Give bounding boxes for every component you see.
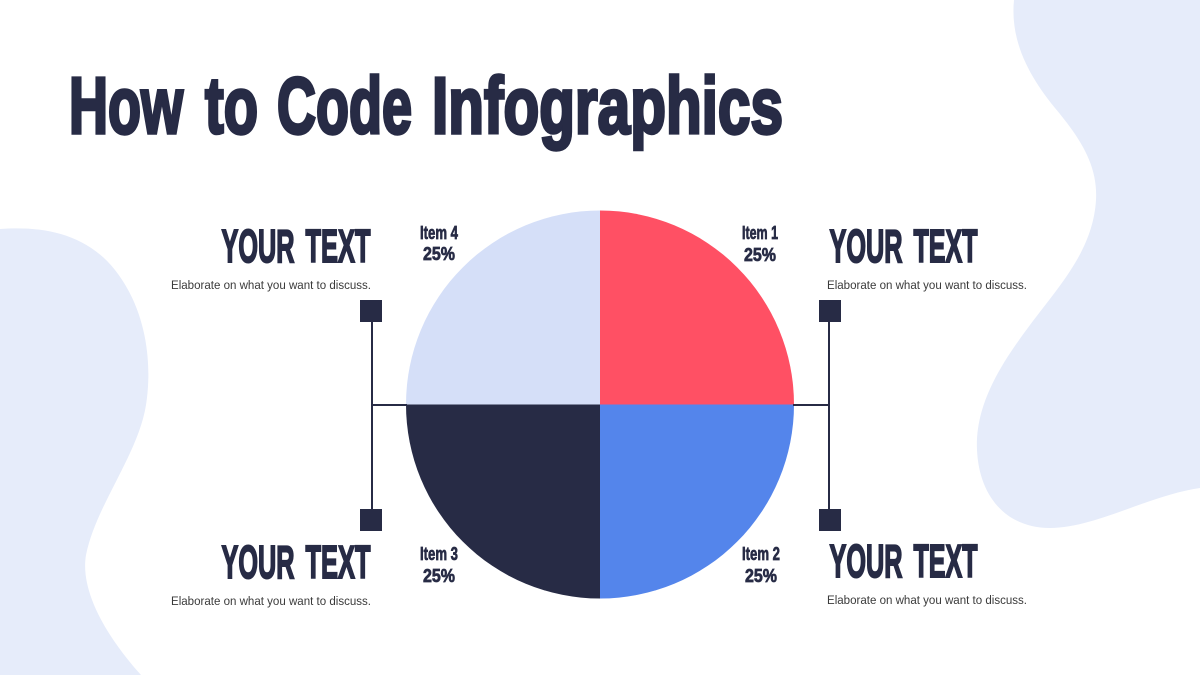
text block: top right: YOUR [830,220,902,272]
text block: bottom right: Elaborate on what you want to discuss. [827,593,1027,607]
text block: bottom left: Elaborate on what you want to discuss. [171,594,371,608]
text block: bottom right [827,535,1027,607]
label: item 4: 25% [423,244,455,264]
slice: item 1 [600,210,794,404]
label: item 4 [420,223,458,264]
background blob: top right [977,0,1200,528]
marker: right bottom [819,509,841,531]
text block: top left: TEXT [306,220,370,272]
background blob: bottom left [0,228,148,675]
text block: bottom left: YOUR [222,536,294,588]
title: Infographics [432,61,783,150]
label: item 3: 25% [423,566,455,586]
label: item 1: Item 1 [742,223,778,243]
label: item 4: Item 4 [420,223,458,243]
label: item 1: 25% [744,245,776,265]
slice: item 4 [406,210,600,404]
label: item 2: 25% [745,566,777,586]
slice: item 2 [600,404,794,598]
label: item 2 [742,544,780,586]
text block: bottom left [171,536,371,608]
text block: top right: TEXT [914,220,978,272]
marker: right top [819,300,841,322]
marker: left bottom [360,509,382,531]
title: to [205,61,258,150]
label: item 2: Item 2 [742,544,780,564]
text block: top right [827,220,1027,292]
title: How [69,61,184,150]
title: Code [277,61,412,150]
text block: top left [171,220,371,292]
slice: item 3 [406,404,600,598]
text block: top left: YOUR [222,220,294,272]
connector: right [793,300,841,531]
text block: bottom right: TEXT [914,535,978,587]
text block: top left: Elaborate on what you want to discuss. [171,278,371,292]
label: item 1 [742,223,778,265]
marker: left top [360,300,382,322]
text block: bottom left: TEXT [306,536,370,588]
text block: bottom right: YOUR [830,535,902,587]
pie chart [406,210,794,598]
text block: top right: Elaborate on what you want to discuss. [827,278,1027,292]
label: item 3: Item 3 [420,544,458,564]
connector: left [360,300,407,531]
label: item 3 [420,544,458,586]
title [69,61,783,150]
